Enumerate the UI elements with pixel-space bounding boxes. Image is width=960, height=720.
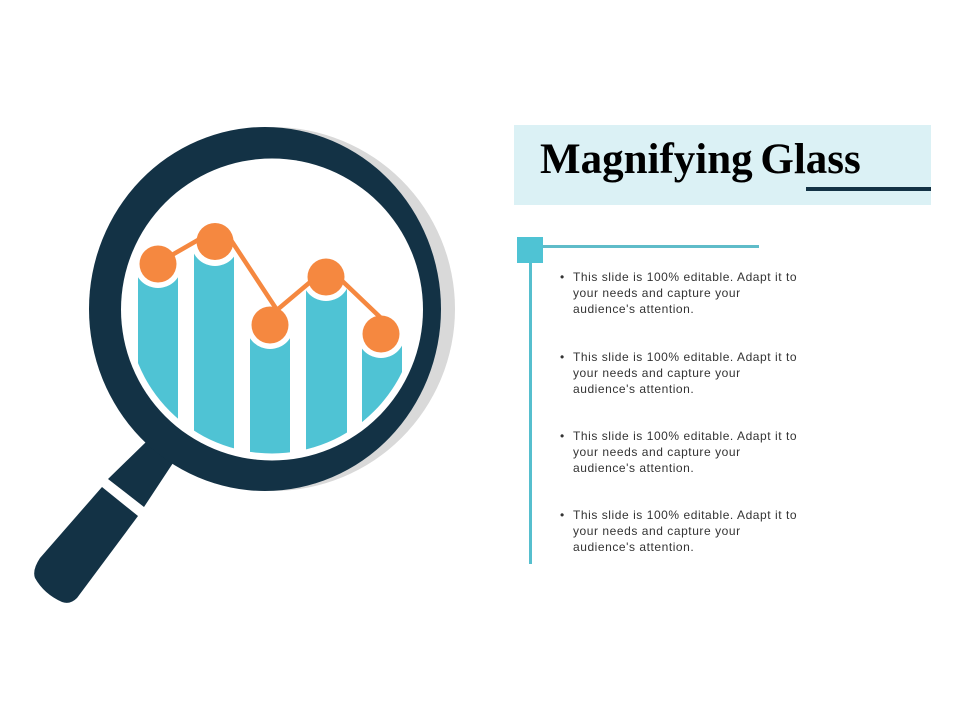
bullet text 1: • [560, 270, 565, 284]
bullet text 3: This slide is 100% editable. Adapt it to [573, 429, 797, 443]
bullet text 1: your needs and capture your [573, 286, 741, 300]
bullet text 3: your needs and capture your [573, 445, 741, 459]
bullet text 2: your needs and capture your [573, 366, 741, 380]
magnifier ring [89, 127, 441, 491]
bullet text 2: audience's attention. [573, 382, 694, 396]
title panel [514, 125, 931, 205]
bullet text 1: This slide is 100% editable. Adapt it to [573, 270, 797, 284]
bullet text 2 [560, 350, 797, 396]
magnifier handle [34, 425, 190, 603]
bullet text 3: • [560, 429, 565, 443]
vertical connector line [529, 260, 532, 564]
horizontal connector line [540, 245, 759, 248]
line chart with markers [140, 223, 400, 352]
bullet text 2: • [560, 350, 565, 364]
lens [121, 158, 423, 460]
icon: magnifying glass with chart [34, 127, 455, 603]
lens shadow [91, 127, 455, 491]
title accent bar [806, 187, 931, 191]
bullet text 4 [560, 508, 797, 554]
bullet text 4: audience's attention. [573, 540, 694, 554]
bullet text 3: audience's attention. [573, 461, 694, 475]
bullet text 4: • [560, 508, 565, 522]
bullet text 1: audience's attention. [573, 302, 694, 316]
title: Magnifying Glass [540, 136, 861, 183]
bullet text 4: This slide is 100% editable. Adapt it to [573, 508, 797, 522]
bullet text 2: This slide is 100% editable. Adapt it to [573, 350, 797, 364]
bullet text 4: your needs and capture your [573, 524, 741, 538]
square marker [517, 237, 543, 263]
bullet text 1 [560, 270, 797, 316]
bar chart [138, 254, 402, 454]
bullet text 3 [560, 429, 797, 475]
